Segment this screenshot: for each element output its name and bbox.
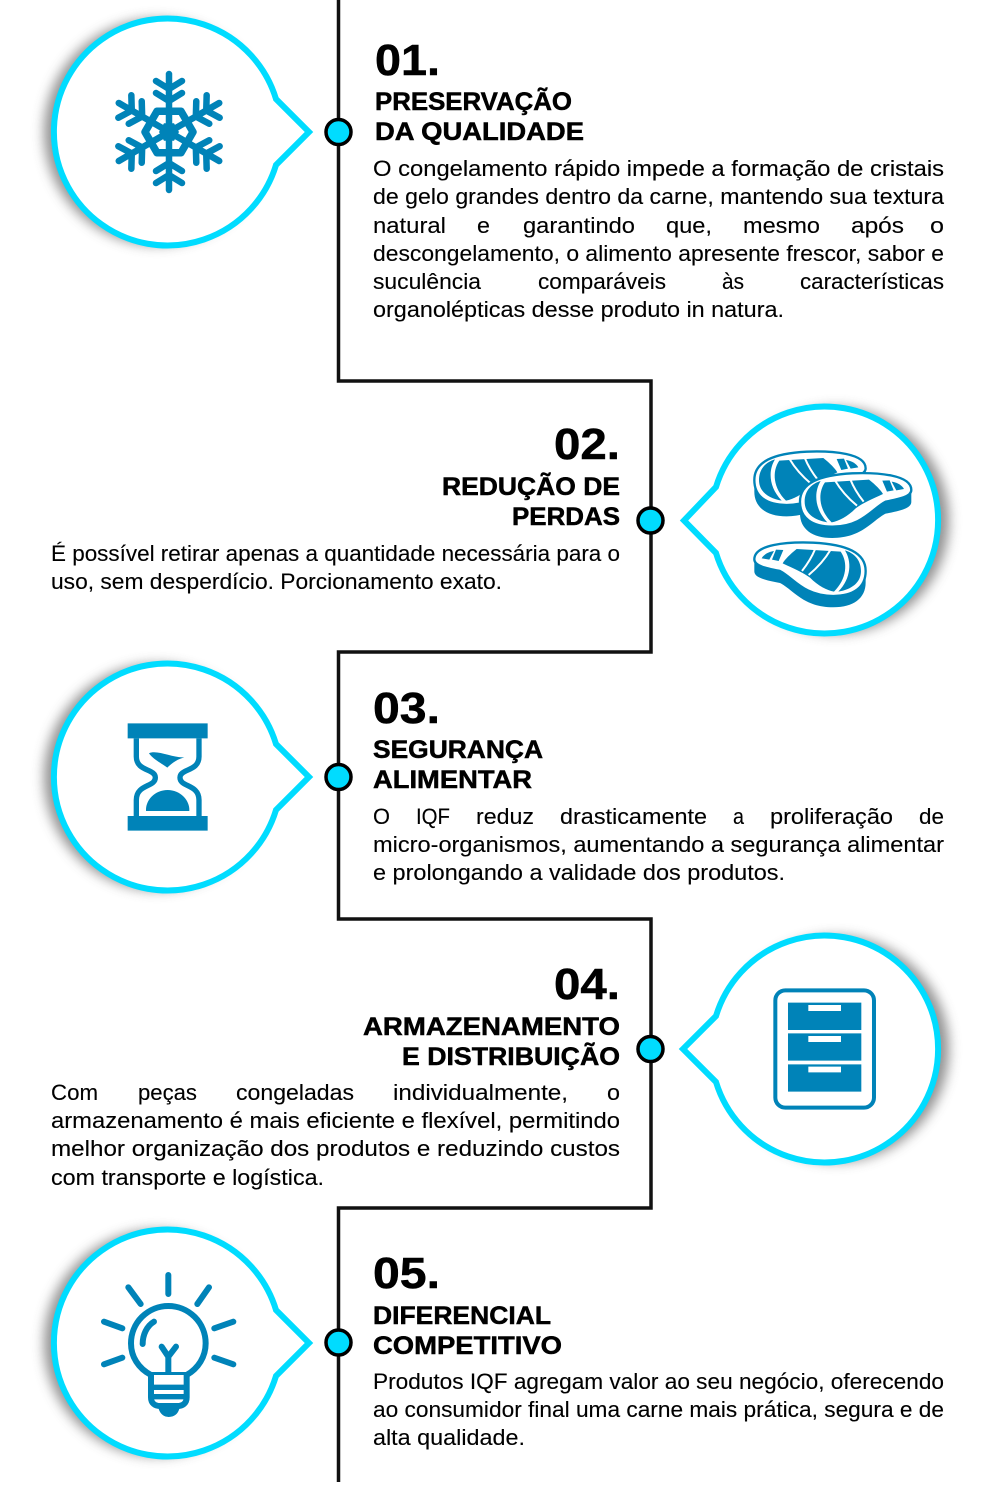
body 05: alta qualidade. xyxy=(373,1425,525,1450)
body 04: melhor organização dos produtos e reduzindo custos xyxy=(51,1136,620,1161)
body 05: ao consumidor final uma carne mais prática, segura e de xyxy=(373,1397,944,1422)
body 03: proliferação xyxy=(770,804,893,829)
bubble 2: steaks xyxy=(684,406,949,634)
number 04: 04. xyxy=(554,960,620,1009)
marker 3 xyxy=(326,764,351,790)
body 01: o xyxy=(930,213,944,238)
icon: filing cabinet xyxy=(775,990,874,1108)
heading 01: DA QUALIDADE xyxy=(375,118,584,146)
heading 05: COMPETITIVO xyxy=(373,1332,562,1360)
body 04 xyxy=(51,1080,620,1190)
heading 03 xyxy=(373,736,543,794)
heading 03: SEGURANÇA xyxy=(373,736,543,764)
icon: hourglass xyxy=(128,723,208,831)
body 03: reduz xyxy=(476,804,534,829)
body 04: individualmente, xyxy=(393,1080,568,1105)
body 01: garantindo xyxy=(523,213,635,238)
item 3 text xyxy=(373,684,944,885)
heading 02 xyxy=(442,471,620,531)
body 02 xyxy=(51,541,620,594)
icon: snowflake xyxy=(112,74,226,190)
body 05: Produtos IQF agregam valor ao seu negócio, oferecendo xyxy=(373,1369,944,1394)
body 01: organolépticas desse produto in natura. xyxy=(373,297,784,322)
body 01: às xyxy=(722,269,744,294)
number 01: 01. xyxy=(375,36,440,85)
heading 04: E DISTRIBUIÇÃO xyxy=(402,1041,620,1071)
body 05 xyxy=(373,1369,944,1450)
bubble 1: snowflake xyxy=(44,18,309,246)
body 04: Com xyxy=(51,1080,98,1105)
timeline connector xyxy=(338,0,651,1482)
body 04: o xyxy=(607,1080,620,1105)
body 01: e xyxy=(477,213,490,238)
body 03: micro-organismos, aumentando a segurança alimentar xyxy=(373,832,944,857)
heading 02: REDUÇÃO DE xyxy=(442,471,620,501)
heading 05: DIFERENCIAL xyxy=(373,1302,551,1330)
body 01: de gelo grandes dentro da carne, mantendo sua textura xyxy=(373,184,945,209)
body 01: suculência xyxy=(373,269,482,294)
heading 01: PRESERVAÇÃO xyxy=(375,86,572,116)
heading 05 xyxy=(373,1302,562,1360)
item 5 text xyxy=(373,1249,944,1450)
marker 4 xyxy=(638,1036,663,1062)
body 03 xyxy=(373,804,944,885)
body 01: que, xyxy=(666,213,712,238)
body 01: comparáveis xyxy=(538,269,666,294)
heading 01 xyxy=(375,86,584,146)
body 01: características xyxy=(800,269,944,294)
bubble 4: cabinet xyxy=(683,936,949,1162)
body 01: natural xyxy=(373,213,446,238)
body 01: O congelamento rápido impede a formação de cristais xyxy=(373,156,944,181)
heading 02: PERDAS xyxy=(512,503,620,531)
body 01: descongelamento, o alimento apresente frescor, sabor e xyxy=(373,241,944,266)
number 03: 03. xyxy=(373,684,440,733)
body 03: e prolongando a validade dos produtos. xyxy=(373,860,785,885)
body 04: peças xyxy=(138,1080,197,1105)
body 02: uso, sem desperdício. Porcionamento exato. xyxy=(51,569,502,594)
item 1 text xyxy=(373,36,945,322)
item 4 text xyxy=(51,960,620,1190)
marker 5 xyxy=(326,1330,351,1355)
body 03: a xyxy=(733,804,745,829)
number 02: 02. xyxy=(554,420,620,469)
icon: steaks xyxy=(754,451,911,607)
heading 04 xyxy=(363,1013,620,1071)
body 03: drasticamente xyxy=(560,804,707,829)
body 04: com transporte e logística. xyxy=(51,1165,324,1190)
bubble 5: light bulb xyxy=(44,1230,309,1456)
number 05: 05. xyxy=(373,1249,440,1298)
body 04: congeladas xyxy=(236,1080,354,1105)
heading 04: ARMAZENAMENTO xyxy=(363,1013,620,1041)
marker 2 xyxy=(638,508,663,533)
heading 03: ALIMENTAR xyxy=(373,766,532,794)
body 01 xyxy=(373,156,945,322)
body 04: armazenamento é mais eficiente e flexível, permitindo xyxy=(51,1108,620,1133)
body 03: IQF xyxy=(416,804,450,829)
item 2 text xyxy=(51,420,620,594)
marker 1 xyxy=(326,120,351,144)
body 01: mesmo xyxy=(743,213,820,238)
bubble 3: hourglass xyxy=(44,663,309,890)
body 01: após xyxy=(851,213,904,238)
icon: light bulb xyxy=(104,1275,233,1414)
body 02: É possível retirar apenas a quantidade necessária para o xyxy=(51,541,620,566)
body 03: de xyxy=(919,804,944,829)
body 03: O xyxy=(373,804,390,829)
